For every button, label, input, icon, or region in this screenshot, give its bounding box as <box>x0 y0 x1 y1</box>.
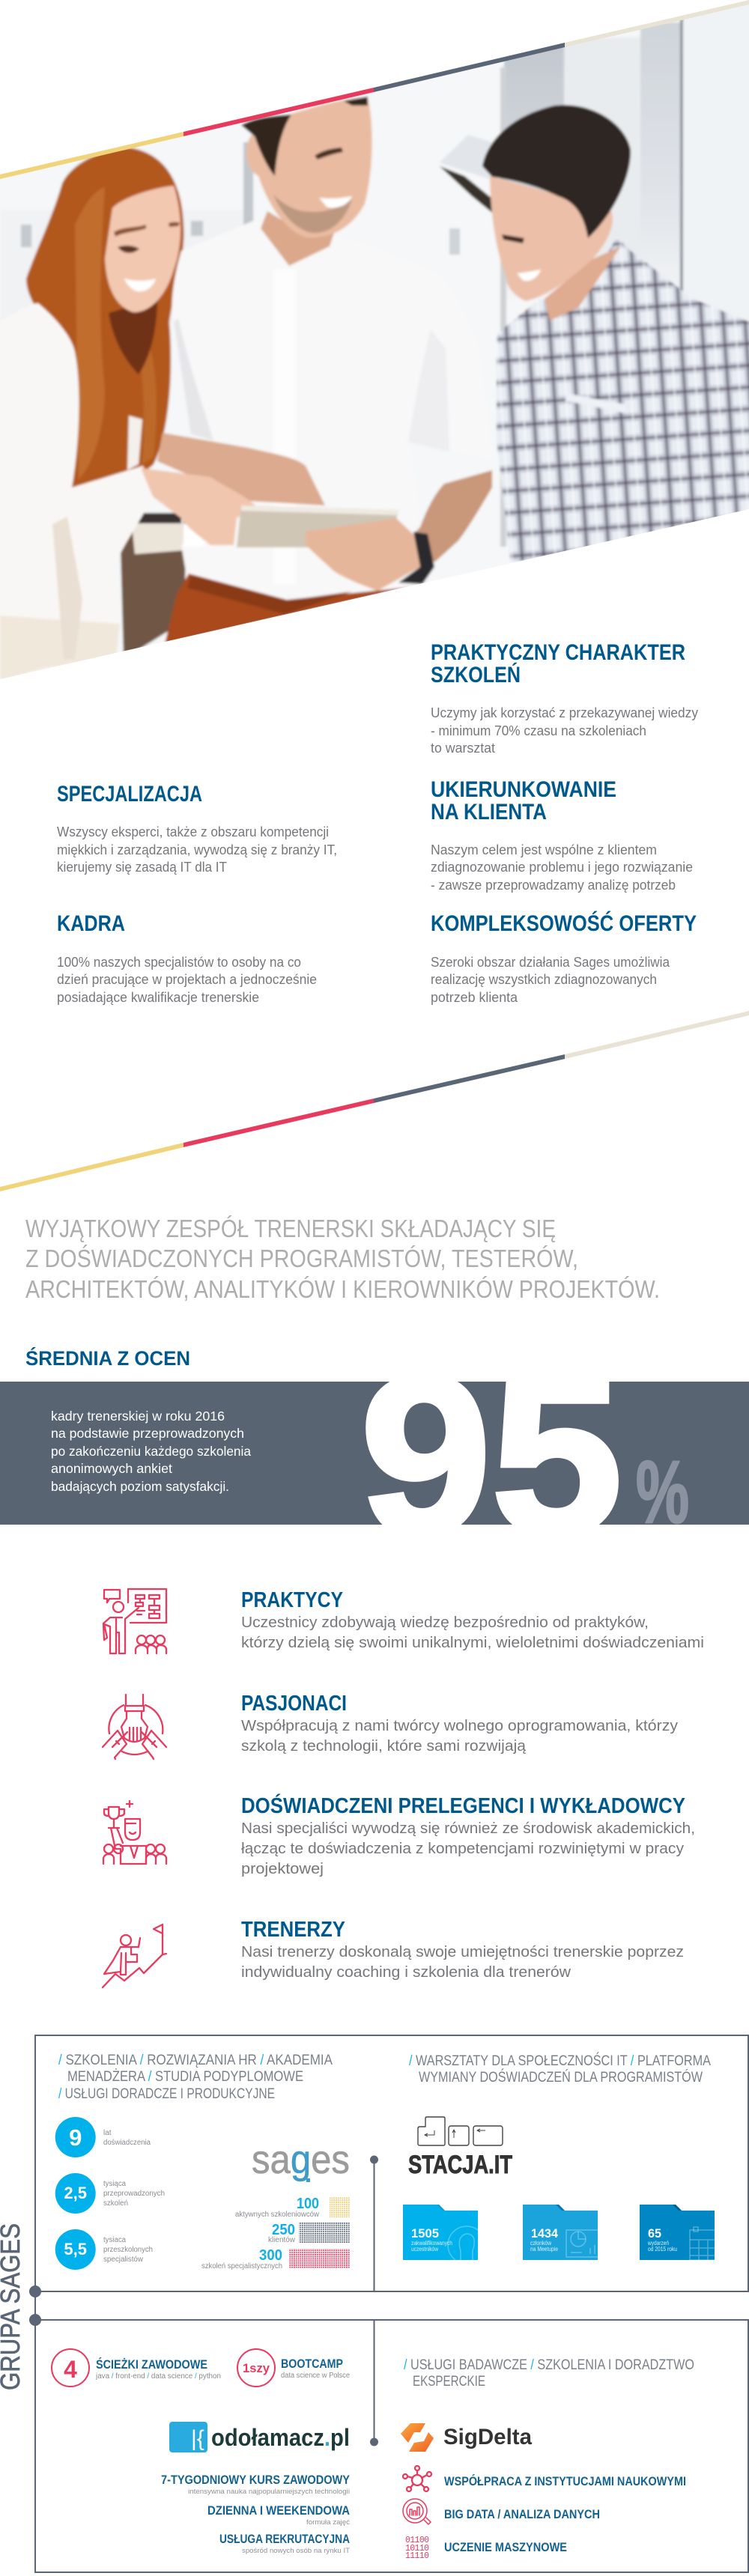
benefit: kadra <box>57 911 317 1005</box>
woman hand <box>141 468 255 545</box>
icon: presenter with board <box>103 1589 166 1653</box>
benefit: kadra: dzień pracujące w projektach a jednocześnie <box>57 971 317 987</box>
percent sign: % <box>636 1443 689 1542</box>
kodołamacz feature list: DZIENNA I WEEKENDOWA <box>207 2504 350 2518</box>
banner description: kadry trenerskiej w roku 2016 <box>51 1409 225 1424</box>
stat: 300 szkoleń: szkoleń specjalistycznych <box>201 2262 282 2270</box>
description: szkolą z technologii, które sami rozwijają <box>241 1737 527 1755</box>
panel: stacja.it services <box>409 2051 711 2086</box>
folder: 65 wydarzeń: od 2015 roku <box>648 2246 677 2253</box>
right man shirt <box>497 237 749 563</box>
item: współpraca naukowa: WSPÓŁPRACA Z INSTYTUCJAMI NAUKOWYMI <box>444 2474 686 2488</box>
team title <box>25 1215 660 1304</box>
icon: binary digits <box>405 2536 429 2561</box>
folder: 1505 uczestników: 1505 <box>411 2226 439 2241</box>
panel: sages services <box>58 2052 333 2102</box>
benefit: praktyczny charakter <box>431 640 699 756</box>
folder: 1434 członków: na Meetupie <box>530 2246 558 2253</box>
middle man shirt <box>169 220 255 569</box>
item: współpraca naukowa <box>403 2466 686 2491</box>
benefit: kompleksowość oferty: realizację wszystkich zdiagnozowanych <box>431 971 657 987</box>
badge: 4 ścieżki zawodowe <box>52 2349 221 2387</box>
benefit: kadra: 100% naszych specjalistów to osoby na co <box>57 954 301 970</box>
item: big data <box>403 2499 600 2524</box>
badge: 1szy bootcamp <box>237 2349 350 2387</box>
item: big data: BIG DATA / ANALIZA DANYCH <box>444 2508 600 2521</box>
feature: trenerzy <box>103 1918 684 1987</box>
description: Uczestnicy zdobywają wiedzę bezpośrednio od praktyków, <box>241 1614 649 1631</box>
panel: sigdelta services: / USŁUGI BADAWCZE / SZKOLENIA I DORADZTWO <box>404 2357 694 2373</box>
benefit: specjalizacja: miękkich i zarządzania, wywodzą się z branży IT, <box>57 842 337 857</box>
kodołamacz feature list: spośród nowych osób na rynku IT <box>242 2547 350 2555</box>
stat: 5,5 tysiaca specjalistów: specjalistów <box>103 2255 144 2264</box>
kodołamacz feature list <box>161 2473 350 2555</box>
kodołamacz feature list: USŁUGA REKRUTACYJNA <box>219 2533 350 2546</box>
benefit: kadra: KADRA <box>57 911 125 936</box>
benefit: specjalizacja: Wszyscy eksperci, także z obszaru kompetencji <box>57 824 329 839</box>
stat: 100 szkoleniowców: aktywnych szkoleniowców <box>235 2211 320 2219</box>
logo: sigdelta <box>401 2423 532 2452</box>
logo: sigdelta: SigDelta <box>443 2425 532 2449</box>
benefit: praktyczny charakter: - minimum 70% czasu na szkoleniach <box>431 723 646 738</box>
icon: network <box>403 2466 431 2491</box>
big number 95: 95 <box>360 1329 622 1581</box>
description: łącząc te doświadczenia z kompetencjami rozwiniętymi w pracy <box>241 1840 685 1857</box>
stat: 100 szkoleniowców: 100 <box>297 2196 319 2212</box>
folder: 1434 członków: 1434 <box>531 2226 559 2241</box>
description: indywidualny coaching i szkolenia dla trenerów <box>241 1963 571 1981</box>
stat: 9 lat doświadczenia: doświadczenia <box>103 2139 151 2147</box>
right arm of middle man <box>416 470 492 562</box>
banner description: na podstawie przeprowadzonych <box>51 1426 244 1441</box>
benefit: ukierunkowanie na klienta: - zawsze przeprowadzamy analizę potrzeb <box>431 877 676 893</box>
benefit: kadra: posiadające kwalifikacje trenerskie <box>57 989 259 1005</box>
panel: sigdelta services <box>404 2357 694 2390</box>
stat: 2,5 tysiąca szkoleń: 2,5 <box>64 2184 87 2202</box>
description: projektowej <box>241 1860 324 1877</box>
right man face <box>490 176 613 301</box>
kodołamacz feature list: 7-TYGODNIOWY KURS ZAWODOWY <box>161 2473 350 2487</box>
badge: 1szy bootcamp: data science w Polsce <box>281 2372 350 2380</box>
benefit: kompleksowość oferty: Szeroki obszar działania Sages umożliwia <box>431 954 670 970</box>
tablet <box>237 505 398 547</box>
folder: 1434 członków <box>523 2205 604 2260</box>
stat: 250 klientów: klientów <box>268 2236 296 2244</box>
stat: 9 lat doświadczenia <box>55 2117 151 2157</box>
badge: 4 ścieżki zawodowe: ŚCIEŻKI ZAWODOWE <box>96 2357 207 2372</box>
kodołamacz feature list: formuła zajęć <box>306 2518 350 2527</box>
description <box>241 1717 679 1755</box>
benefit: specjalizacja <box>57 782 337 875</box>
benefit: specjalizacja: SPECJALIZACJA <box>57 782 202 806</box>
stat: 9 lat doświadczenia: 9 <box>69 2124 82 2151</box>
kodołamacz feature list: intensywna nauka najpopularniejszych technologii <box>188 2488 350 2496</box>
description: Współpracują z nami twórcy wolnego oprogramowania, którzy <box>241 1717 679 1734</box>
heading: PASJONACI <box>241 1692 347 1716</box>
stat: 300 szkoleń: 300 <box>259 2247 282 2264</box>
folder: 65 wydarzeń <box>640 2205 720 2260</box>
badge: 1szy bootcamp: 1szy <box>243 2361 270 2375</box>
icon: binary digits: 11110 <box>405 2551 429 2561</box>
logo: stacja.it: STACJA.IT <box>408 2151 512 2179</box>
item: uczenie maszynowe <box>405 2536 567 2561</box>
team title: ARCHITEKTÓW, ANALITYKÓW I KIEROWNIKÓW PROJEKTÓW. <box>25 1275 660 1304</box>
team title: Z DOŚWIADCZONYCH PROGRAMISTÓW, TESTERÓW, <box>25 1244 578 1273</box>
description <box>241 1943 684 1981</box>
middle man face <box>246 97 372 237</box>
benefit: kompleksowość oferty <box>431 911 697 1005</box>
benefit: praktyczny charakter: SZKOLEŃ <box>431 662 521 687</box>
folder: 65 wydarzeń: 65 <box>648 2226 661 2241</box>
folder: 1505 uczestników <box>403 2205 478 2260</box>
panel: sages services: / USŁUGI DORADCZE I PRODUKCYJNE <box>58 2086 275 2102</box>
woman neck shadow <box>109 298 157 374</box>
folder: 65 wydarzeń: wydarzeń <box>647 2240 669 2247</box>
benefit: ukierunkowanie na klienta: Naszym celem jest wspólne z klientem <box>431 842 657 857</box>
logo: kodołamacz.pl <box>169 2422 350 2452</box>
benefit: ukierunkowanie na klienta: UKIERUNKOWANIE <box>431 777 616 802</box>
stat: 2,5 tysiąca szkoleń: szkoleń <box>103 2199 128 2208</box>
stat: 5,5 tysiaca specjalistów <box>55 2229 153 2270</box>
banner description <box>51 1409 251 1494</box>
description <box>241 1820 695 1877</box>
benefit: ukierunkowanie na klienta <box>431 777 693 893</box>
badge: 4 ścieżki zawodowe: 4 <box>64 2356 77 2383</box>
icon: climber with flag <box>103 1925 166 1987</box>
right man hair <box>482 105 631 238</box>
folder: 1505 uczestników: zakwalifikowanych <box>411 2240 452 2247</box>
icon: joined hands <box>103 1695 166 1759</box>
icon: binary digits: 01100 <box>405 2536 429 2545</box>
logo: stacja.it <box>408 2117 512 2179</box>
hero photo: three people looking at a tablet <box>0 0 749 689</box>
stat: 250 klientów <box>268 2222 350 2244</box>
benefit: ukierunkowanie na klienta: NA KLIENTA <box>431 800 547 824</box>
heading: DOŚWIADCZENI PRELEGENCI I WYKŁADOWCY <box>241 1793 685 1818</box>
stat: 5,5 tysiaca specjalistów: 5,5 <box>64 2240 87 2258</box>
benefit: praktyczny charakter: PRAKTYCZNY CHARAKTER <box>431 640 685 665</box>
logo: kodołamacz.pl: odołamacz.pl <box>211 2424 350 2451</box>
folder: 1505 uczestników: uczestników <box>411 2246 438 2253</box>
badge: 4 ścieżki zawodowe: java / front-end / data science / python <box>95 2372 221 2381</box>
stat: 9 lat doświadczenia: lat <box>103 2129 112 2137</box>
woman sweater <box>4 301 146 553</box>
stat: 100 szkoleniowców <box>235 2196 350 2219</box>
description <box>241 1614 704 1651</box>
description: Nasi trenerzy doskonalą swoje umiejętności trenerskie poprzez <box>241 1943 684 1960</box>
benefit: praktyczny charakter: to warsztat <box>431 740 495 756</box>
benefit: specjalizacja: kierujemy się zasadą IT dla IT <box>57 859 227 875</box>
banner description: po zakończeniu każdego szkolenia <box>51 1444 251 1459</box>
keyboard keys <box>418 2117 503 2145</box>
stat: 300 szkoleń <box>201 2247 350 2270</box>
icon: magnifier with chart <box>403 2499 431 2524</box>
heading: TRENERZY <box>241 1918 345 1942</box>
logo: kodołamacz.pl: |{ <box>191 2426 204 2451</box>
benefit: kompleksowość oferty: KOMPLEKSOWOŚĆ OFERTY <box>431 911 697 936</box>
heading: PRAKTYCY <box>241 1588 343 1612</box>
banner description: badających poziom satysfakcji. <box>51 1479 229 1494</box>
badge: 1szy bootcamp: BOOTCAMP <box>281 2357 343 2371</box>
panel frames and connector dots <box>29 2035 748 2572</box>
stat: 5,5 tysiaca specjalistów: przeszkolonych <box>103 2246 153 2254</box>
benefits block <box>57 640 699 1005</box>
team title: WYJĄTKOWY ZESPÓŁ TRENERSKI SKŁADAJĄCY SIĘ <box>25 1215 556 1243</box>
coloured stripe: top <box>0 0 749 179</box>
banner description: anonimowych ankiet <box>51 1461 172 1476</box>
stat: 250 klientów: 250 <box>272 2222 295 2238</box>
logo: sages: sages <box>252 2137 350 2182</box>
stat: 2,5 tysiąca szkoleń: tysiąca <box>103 2180 126 2188</box>
stat: 5,5 tysiaca specjalistów: tysiaca <box>103 2236 126 2244</box>
description: którzy dzielą się swoimi unikalnymi, wieloletnimi doświadczeniami <box>241 1634 704 1651</box>
benefit: kompleksowość oferty: potrzeb klienta <box>431 989 518 1005</box>
middle man forearm <box>157 433 325 505</box>
panel: stacja.it services: / WARSZTATY DLA SPOŁECZNOŚCI IT / PLATFORMA <box>409 2051 711 2069</box>
right man neck <box>545 246 621 321</box>
panel: sigdelta services: EKSPERCKIE <box>413 2373 485 2390</box>
icon: binary digits: 10110 <box>405 2544 429 2554</box>
heading: średnia z ocen: ŚREDNIA Z OCEN <box>25 1346 190 1370</box>
benefit: praktyczny charakter: Uczymy jak korzystać z przekazywanej wiedzy <box>431 705 699 720</box>
rating banner <box>0 1329 749 1581</box>
folder: 1434 członków: członków <box>530 2240 551 2247</box>
feature: praktycy <box>103 1588 704 1653</box>
panel: sages services: / SZKOLENIA / ROZWIĄZANIA HR / AKADEMIA <box>58 2052 333 2068</box>
panel: sages services: MENADŻERA / STUDIA PODYPLOMOWE <box>67 2068 303 2085</box>
stat: 2,5 tysiąca szkoleń: przeprowadzonych <box>103 2190 165 2198</box>
benefit: ukierunkowanie na klienta: zdiagnozowanie problemu i jego rozwiązanie <box>431 859 693 875</box>
middle man neck <box>261 211 334 266</box>
woman face <box>105 186 181 312</box>
icon: trophy and audience <box>103 1801 166 1864</box>
feature: pasjonaci <box>103 1692 679 1759</box>
item: uczenie maszynowe: UCZENIE MASZYNOWE <box>444 2541 567 2554</box>
coloured stripe: middle <box>0 1011 749 1191</box>
middle man pants <box>165 574 410 644</box>
description: Nasi specjaliści wywodzą się również ze środowisk akademickich, <box>241 1820 695 1837</box>
woman hair <box>26 148 184 488</box>
feature: doświadczeni prelegenci <box>103 1793 695 1877</box>
stat: 2,5 tysiąca szkoleń <box>55 2173 165 2214</box>
